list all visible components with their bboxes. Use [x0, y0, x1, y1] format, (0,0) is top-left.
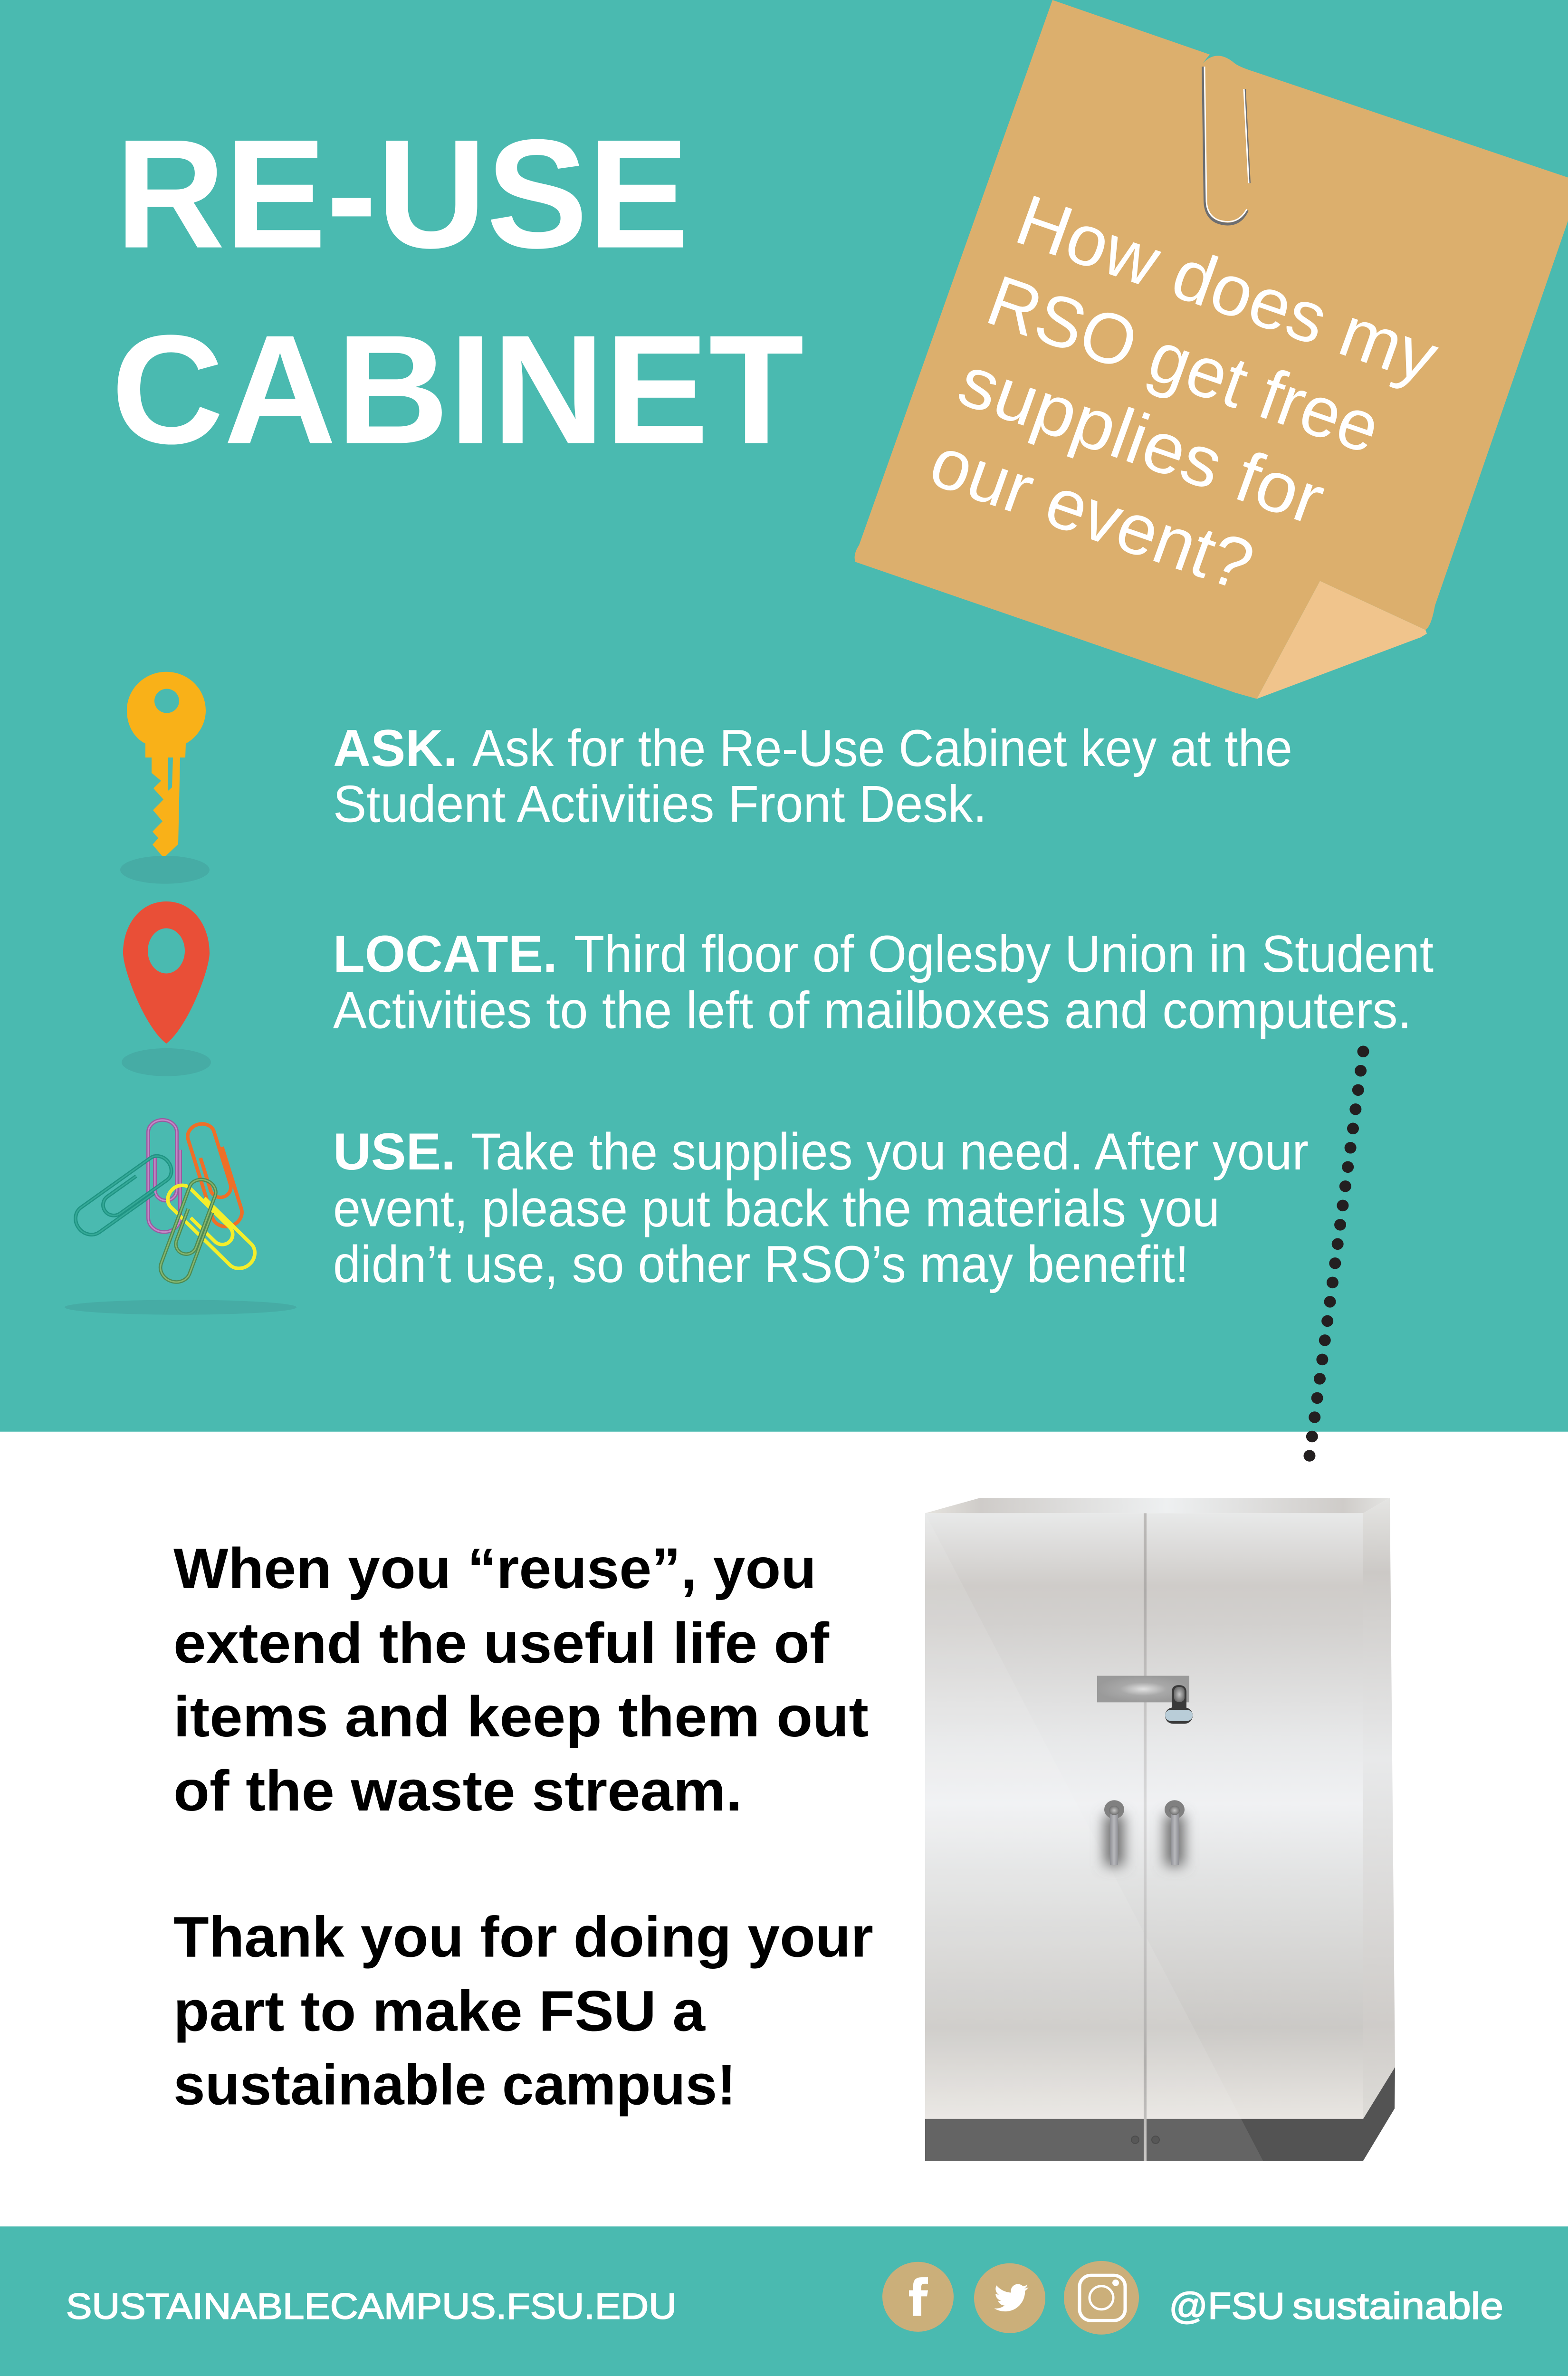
message text: reuse and thank you: sustainable campus!	[173, 2053, 736, 2117]
step text: locate: LOCATE.	[333, 925, 557, 983]
cabinet plinth side	[1363, 2067, 1395, 2161]
icon: key	[120, 672, 210, 884]
left door handle	[1104, 1800, 1124, 1866]
cabinet doors	[925, 1513, 1363, 2119]
cabinet plinth	[925, 2119, 1363, 2161]
icon: instagram	[1064, 2261, 1139, 2335]
orange paperclip	[185, 1120, 245, 1230]
message text: reuse and thank you: extend the useful life of	[173, 1611, 829, 1675]
teal header background panel	[0, 0, 1568, 1432]
step text: use: event, please put back the materials you	[333, 1179, 1220, 1237]
step text: use	[333, 1122, 1309, 1293]
footer bar	[0, 2226, 1568, 2376]
pin body	[123, 901, 210, 1044]
step text: use: Take the supplies you need. After your	[471, 1122, 1309, 1181]
step text: use: didn’t use, so other RSO’s may benefit!	[333, 1235, 1189, 1293]
purple paperclip	[148, 1120, 180, 1232]
paperclips shadow	[65, 1300, 296, 1315]
step text: ask: Student Activities Front Desk.	[333, 775, 987, 833]
note paper	[855, 0, 1568, 699]
title line: CABINET: CABINET	[111, 302, 804, 476]
cabinet side face	[1363, 1498, 1395, 2119]
step text: locate: Third floor of Oglesby Union in Student	[574, 925, 1434, 983]
note text: our event?	[920, 422, 1263, 606]
step text: ask: Ask for the Re-Use Cabinet key at the	[472, 719, 1292, 777]
title	[111, 107, 804, 476]
dotted connector line	[1307, 1052, 1363, 1475]
message text: reuse and thank you: Thank you for doing your	[173, 1905, 873, 1969]
note text: supplies for	[949, 341, 1335, 540]
icon: location pin	[122, 901, 211, 1076]
cabinet top face	[925, 1498, 1390, 1513]
plinth screws	[1131, 2136, 1159, 2144]
key shadow	[120, 856, 210, 884]
step text: ask: ASK.	[333, 719, 458, 777]
message text: reuse and thank you: of the waste stream.	[173, 1759, 742, 1823]
note text	[920, 180, 1448, 606]
step text: ask	[333, 719, 1292, 833]
note text: How does my	[1006, 180, 1448, 398]
teal paperclip	[69, 1151, 179, 1240]
icon: facebook	[882, 2262, 954, 2332]
hasp plate	[1097, 1676, 1189, 1702]
icon: twitter	[974, 2263, 1045, 2333]
step text: locate	[333, 925, 1434, 1039]
message text: reuse and thank you: items and keep them out	[173, 1685, 869, 1749]
sticky note callout	[855, 0, 1568, 699]
title line: RE-USE: RE-USE	[115, 107, 689, 280]
door sheen	[925, 1513, 1263, 2161]
footer website text: SUSTAINABLECAMPUS.FSU.EDU	[66, 2286, 677, 2327]
message text: reuse and thank you	[173, 1536, 873, 2117]
folded corner	[1257, 581, 1427, 699]
door seam	[1144, 1513, 1147, 2161]
message text: reuse and thank you: part to make FSU a	[173, 1979, 706, 2043]
footer social handle	[1169, 2285, 1503, 2327]
yellow paperclip	[163, 1178, 261, 1274]
illustration: locked cabinet	[925, 1498, 1395, 2161]
footer social handle: sustainable	[1292, 2285, 1503, 2327]
green paperclip	[156, 1176, 222, 1286]
paperclip on note	[1203, 67, 1250, 224]
icon: colored paperclips	[65, 1120, 296, 1315]
note text: RSO get free	[977, 260, 1390, 469]
footer social handle: @FSU	[1169, 2285, 1285, 2327]
pin shadow	[122, 1048, 211, 1076]
step text: use: USE.	[333, 1122, 456, 1181]
padlock	[1165, 1685, 1193, 1724]
right door handle	[1165, 1800, 1185, 1866]
key body	[127, 672, 206, 856]
message text: reuse and thank you: When you “reuse”, you	[173, 1536, 816, 1600]
step text: locate: Activities to the left of mailboxes and computers.	[333, 981, 1412, 1039]
